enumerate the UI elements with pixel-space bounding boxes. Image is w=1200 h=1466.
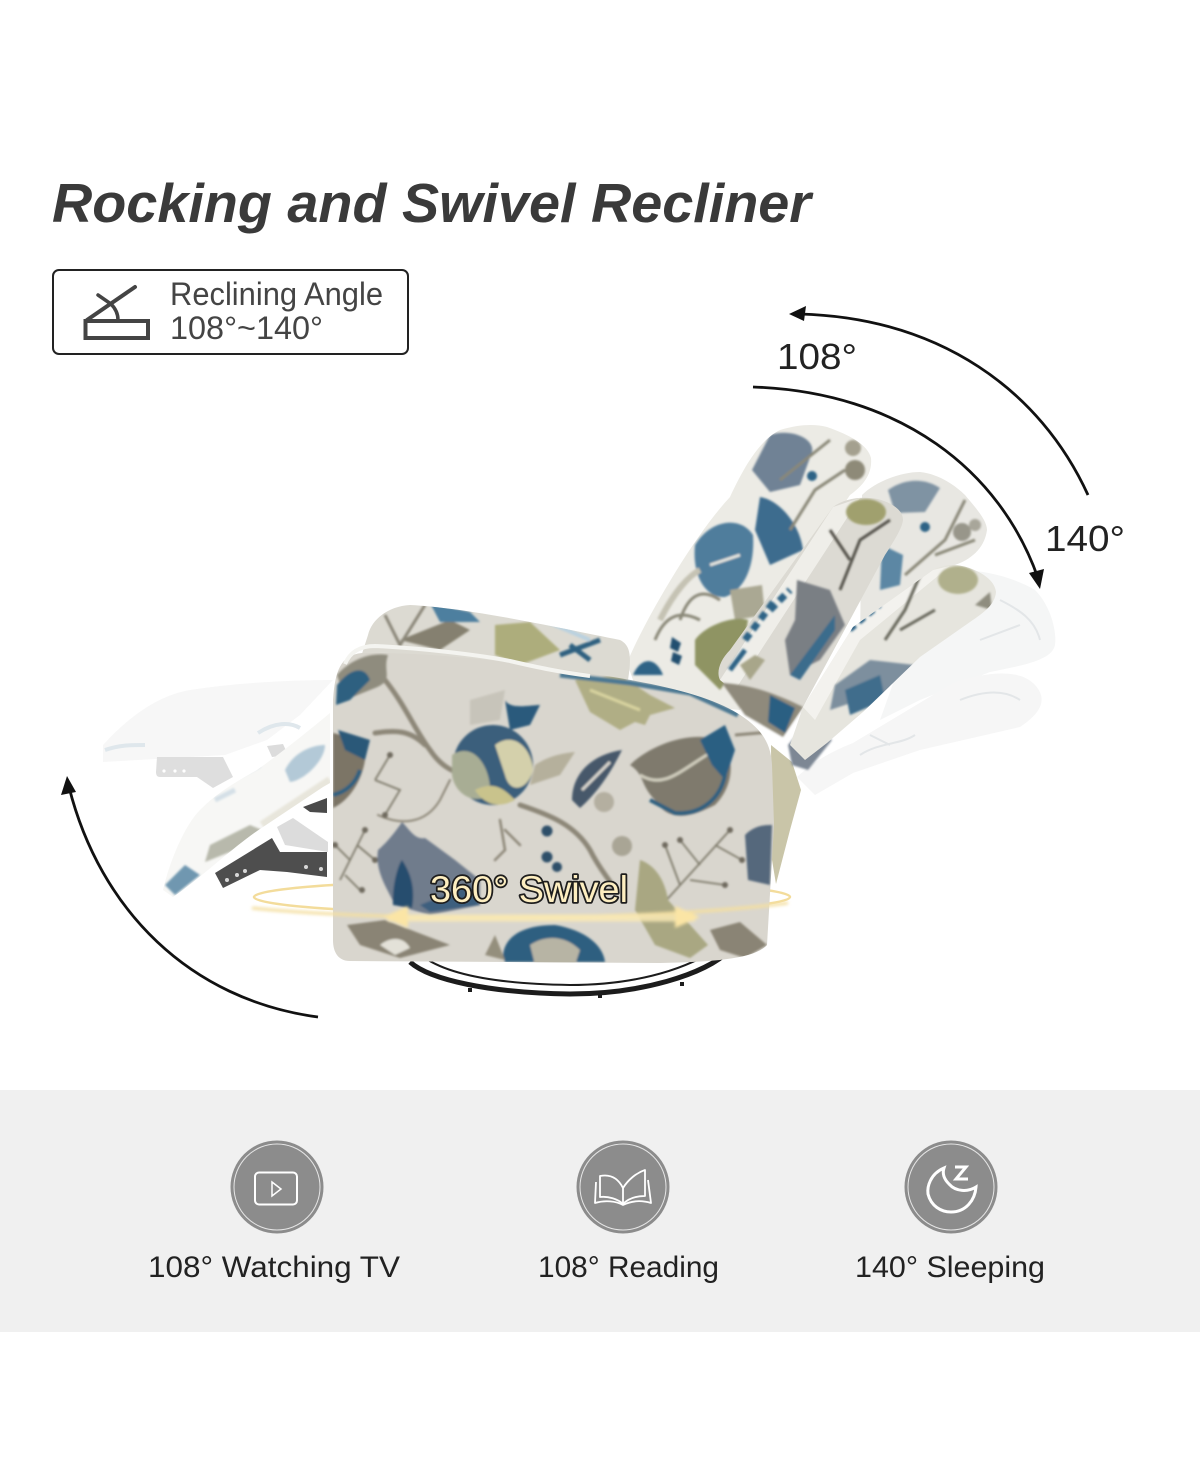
label: 360 swivel: 360° Swivel: [430, 869, 628, 910]
floral pattern: [332, 654, 772, 965]
swivel ring back half: [254, 880, 790, 914]
icon: watching TV: [230, 1140, 324, 1234]
armrest side panel: [332, 646, 774, 965]
seat cushion: [362, 605, 630, 680]
label: reading: 108° Reading: [538, 1251, 719, 1284]
callout text: 108°~140°: [170, 310, 323, 346]
swivel direction arrows: [252, 903, 788, 928]
title: Rocking and Swivel Recliner: [52, 172, 814, 234]
infographic canvas: [0, 182, 1200, 1332]
left edge flower: [333, 733, 365, 808]
backrest position behind: [860, 472, 987, 622]
arrow: backrest 140 degrees: [753, 387, 1044, 589]
panel: usage modes: [0, 1090, 1200, 1332]
striped leaf: [572, 750, 622, 808]
faded footrest position: [103, 680, 333, 788]
left leaf: [337, 654, 388, 700]
olive leaf: [575, 675, 675, 730]
swivel base: [410, 950, 730, 998]
callout text: [170, 276, 383, 346]
white piping: [345, 646, 590, 676]
buds: [594, 792, 614, 812]
icon: sleeping: [904, 1140, 998, 1234]
backrest position 3: [790, 565, 996, 760]
extended footrest: [160, 710, 335, 900]
right flower: [630, 737, 731, 816]
back of the chair frame: [771, 745, 801, 884]
label: sleeping: 140° Sleeping: [855, 1251, 1045, 1284]
olive leaf lower: [635, 860, 708, 958]
label: 108 degrees: 108°: [777, 336, 857, 377]
branches: [375, 680, 615, 890]
backrest position 1: [620, 420, 880, 710]
callout: reclining angle: [53, 270, 408, 354]
centre pomegranate: [453, 725, 533, 805]
arrow: backrest 108 degrees: [789, 306, 1088, 495]
icon: reading: [576, 1140, 670, 1234]
backrest position 2: [718, 498, 903, 724]
sprays: [335, 755, 742, 905]
faded recline positions: [797, 570, 1055, 795]
label: watching TV: 108° Watching TV: [148, 1251, 400, 1284]
label: 140 degrees: 140°: [1045, 518, 1125, 559]
bottom motifs: [347, 920, 450, 958]
arrow: footrest: [61, 776, 318, 1017]
footrest brackets: [215, 798, 328, 888]
lower cushion fold: [722, 683, 832, 770]
callout text: Reclining Angle: [170, 276, 383, 312]
paisley: [377, 822, 480, 915]
icon: reclining angle: [86, 287, 148, 338]
